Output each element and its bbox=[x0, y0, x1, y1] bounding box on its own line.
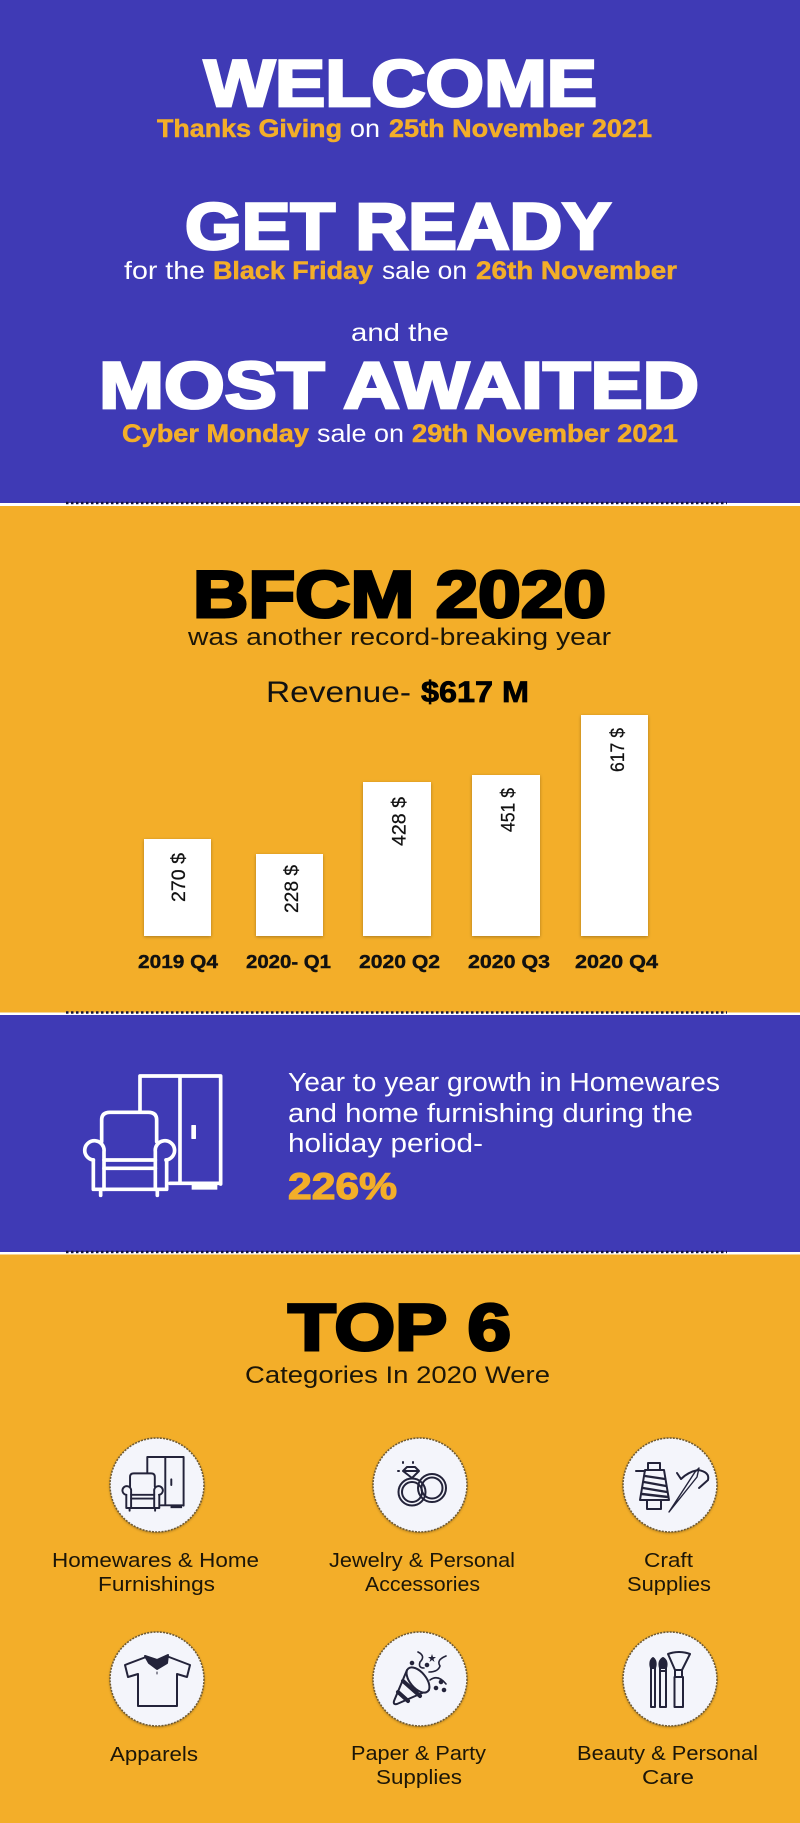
text: cyber monday date: 29th November 2021 bbox=[412, 420, 678, 448]
text: and the: and the bbox=[351, 319, 449, 347]
category: paper and party: Paper & Party bbox=[351, 1743, 486, 1765]
bar: 2020 Q2: 2020 Q2 bbox=[359, 951, 440, 972]
category: apparels: Apparels bbox=[110, 1744, 198, 1766]
category: beauty: Care bbox=[642, 1767, 694, 1789]
category: beauty: Beauty & Personal bbox=[577, 1743, 758, 1765]
text: black friday date: for the bbox=[124, 257, 205, 285]
category: craft bbox=[623, 1438, 717, 1596]
panel: top 6 categories bbox=[0, 1254, 800, 1823]
text: black friday date bbox=[124, 257, 677, 285]
category: jewelry: Accessories bbox=[365, 1574, 480, 1596]
bar: 2019 Q4: 2019 Q4 bbox=[138, 951, 219, 972]
category: homewares: Furnishings bbox=[98, 1574, 215, 1596]
bar: 2020 Q1 bbox=[246, 854, 331, 972]
text: black friday date: sale on bbox=[382, 257, 467, 285]
text: thanksgiving date: 25th November 2021 bbox=[389, 115, 652, 143]
panel: revenue bbox=[0, 504, 800, 1014]
heading: get ready: GET READY bbox=[185, 189, 611, 263]
category: jewelry: Jewelry & Personal bbox=[329, 1550, 515, 1572]
bar: 2019 Q4: 270 $ bbox=[169, 853, 190, 902]
bar: 2020 Q3: 2020 Q3 bbox=[468, 951, 550, 972]
text: growth description: and home furnishing during the bbox=[288, 1100, 693, 1128]
category: homewares: Homewares & Home bbox=[52, 1550, 259, 1572]
text: cyber monday date: Cyber Monday bbox=[122, 420, 309, 448]
text: thanksgiving date: on bbox=[350, 115, 380, 143]
category: jewelry bbox=[329, 1438, 515, 1596]
text: categories subtitle: Categories In 2020 Were bbox=[245, 1362, 550, 1389]
category: beauty bbox=[577, 1632, 758, 1789]
text: record-breaking year: was another record-breaking year bbox=[187, 624, 611, 651]
category: paper and party: Supplies bbox=[376, 1767, 462, 1789]
bar: 2020 Q1: 2020- Q1 bbox=[246, 951, 331, 972]
icon: armchair and wardrobe bbox=[85, 1076, 221, 1195]
bar: 2020 Q4 bbox=[575, 715, 659, 972]
text: cyber monday date: sale on bbox=[317, 420, 404, 448]
bar: 2020 Q4: 617 $ bbox=[608, 728, 629, 772]
bar chart bbox=[138, 715, 659, 972]
category: craft: Supplies bbox=[627, 1574, 711, 1596]
stat: 226%: 226% bbox=[288, 1166, 397, 1207]
bar: 2020 Q4: 2020 Q4 bbox=[575, 951, 659, 972]
bar: 2020 Q3 bbox=[468, 775, 550, 972]
category: apparels bbox=[110, 1632, 204, 1766]
text: thanksgiving date: Thanks Giving bbox=[157, 115, 342, 143]
text: revenue total bbox=[266, 676, 529, 709]
bar: 2020 Q2 bbox=[359, 782, 440, 972]
heading: top 6: TOP 6 bbox=[288, 1290, 511, 1364]
bar: 2019 Q4 bbox=[138, 839, 219, 972]
bar: 2020 Q3: 451 $ bbox=[498, 788, 520, 832]
text: cyber monday date bbox=[122, 420, 678, 448]
bar: 2020 Q1: 228 $ bbox=[282, 865, 303, 913]
text: growth description: holiday period- bbox=[288, 1130, 483, 1158]
category: paper and party bbox=[351, 1632, 486, 1789]
panel: homewares growth bbox=[0, 1014, 800, 1254]
text: growth description bbox=[288, 1069, 720, 1158]
text: growth description: Year to year growth in Homewares bbox=[288, 1069, 720, 1097]
text: revenue total: $617 M bbox=[421, 676, 529, 709]
bar: 2020 Q2: 428 $ bbox=[390, 797, 410, 846]
text: revenue total: Revenue- bbox=[266, 676, 411, 709]
category: homewares bbox=[52, 1438, 259, 1596]
heading: welcome: WELCOME bbox=[204, 46, 597, 120]
category: craft: Craft bbox=[644, 1550, 693, 1572]
text: black friday date: Black Friday bbox=[213, 257, 373, 285]
panel: welcome bbox=[0, 0, 800, 504]
heading: most awaited: MOST AWAITED bbox=[99, 348, 699, 422]
text: thanksgiving date bbox=[157, 115, 652, 143]
heading: bfcm 2020: BFCM 2020 bbox=[193, 557, 606, 631]
text: black friday date: 26th November bbox=[476, 257, 677, 285]
